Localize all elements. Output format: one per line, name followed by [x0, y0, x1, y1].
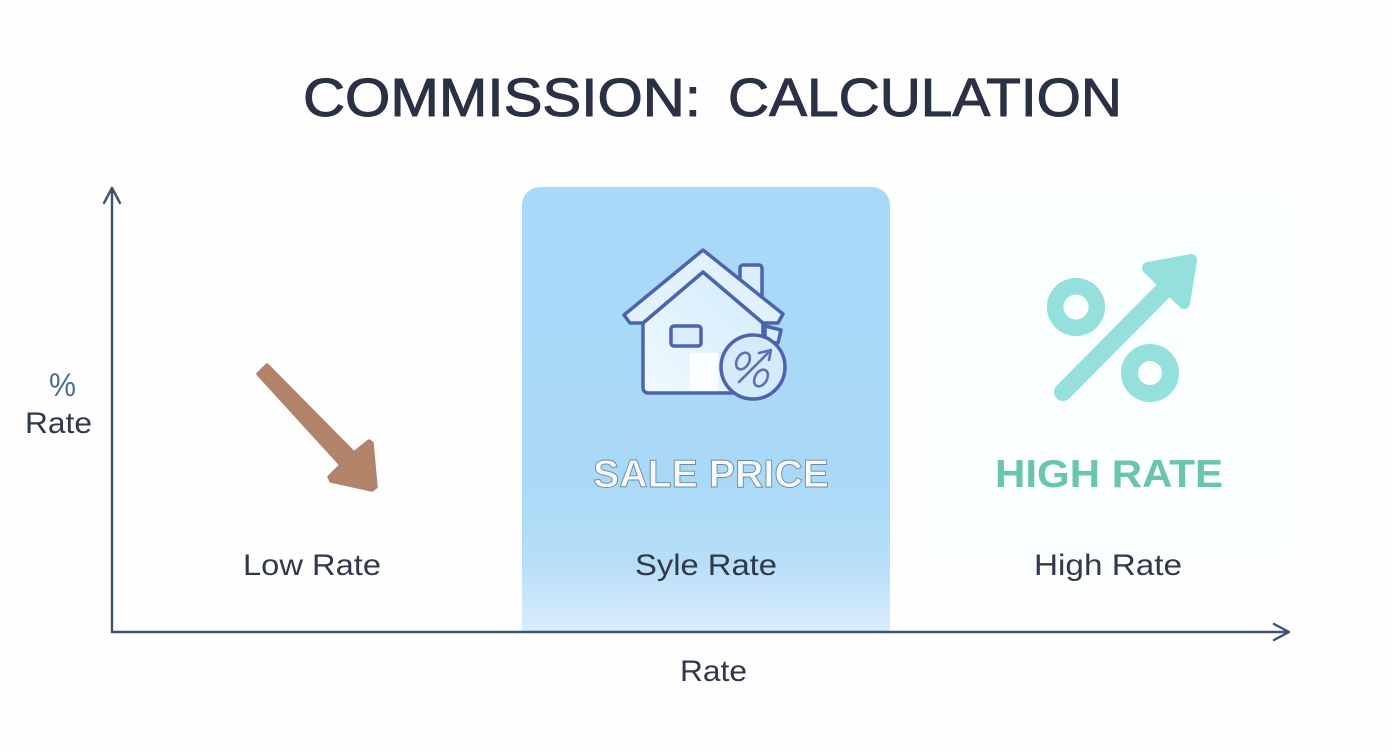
- panel: high rate: [922, 187, 1290, 605]
- icon: percent with rising arrow: [1055, 260, 1191, 394]
- title: COMMISSION:: [303, 68, 701, 128]
- heading: high rate: HIGH RATE: [995, 453, 1223, 496]
- y axis label: Rate: [25, 407, 92, 440]
- y axis label: %: [49, 367, 76, 403]
- label: low rate: Low Rate: [243, 549, 381, 582]
- heading: sale price: SALE PRICE: [593, 453, 829, 496]
- icon: house with percent badge: [624, 250, 785, 399]
- panel: low rate: [243, 365, 381, 582]
- label: high rate: High Rate: [1034, 549, 1182, 582]
- label: style rate: Syle Rate: [635, 549, 777, 582]
- title: [303, 68, 1122, 128]
- y axis label: [25, 367, 92, 440]
- x axis label: Rate: [680, 655, 747, 688]
- panel: sale price: [522, 187, 890, 632]
- axes: [104, 188, 1289, 640]
- icon: falling arrow: [258, 365, 376, 490]
- title: CALCULATION: [728, 68, 1122, 128]
